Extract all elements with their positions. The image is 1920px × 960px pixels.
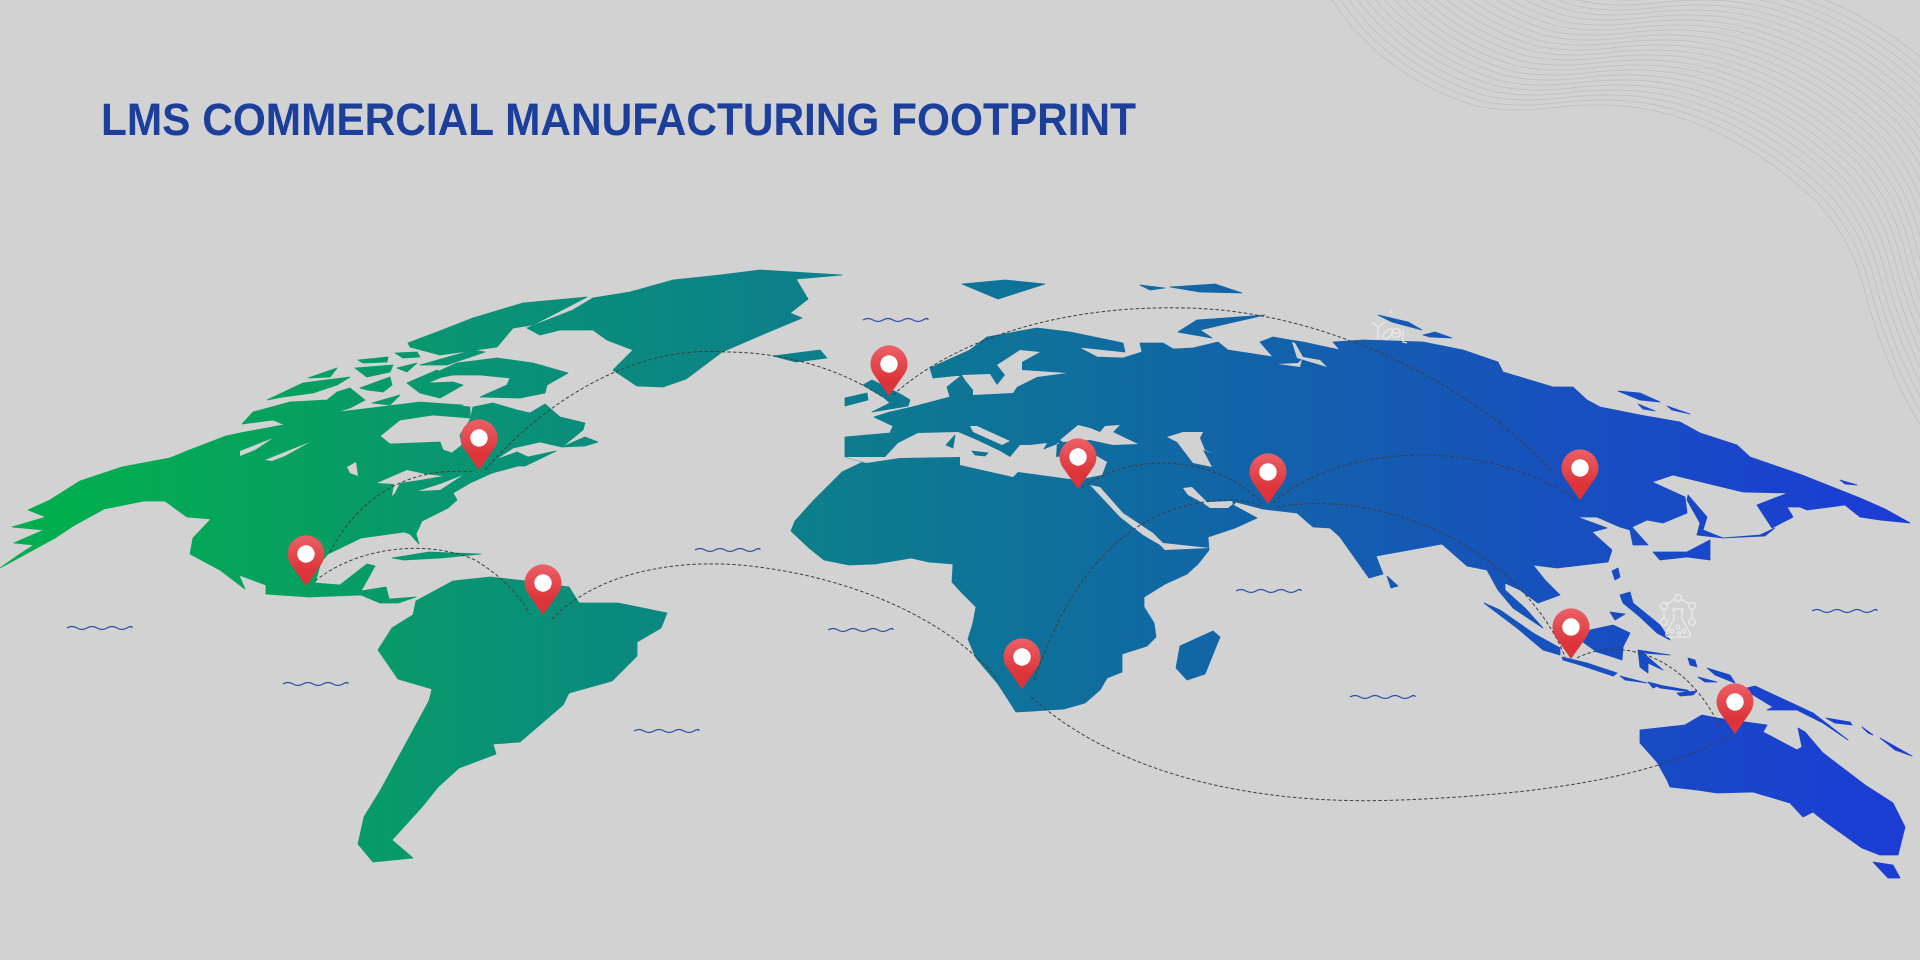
ocean waves — [67, 318, 1877, 732]
pin: Indonesia — [1552, 608, 1590, 659]
North America — [0, 297, 598, 603]
title: LMS COMMERCIAL MANUFACTURING FOOTPRINT — [101, 94, 1136, 145]
icon: pill factory — [1372, 310, 1407, 343]
Novaya Zemlya — [1178, 315, 1265, 338]
inland seas — [845, 342, 1327, 550]
decorative contour lines, top right — [1331, 0, 1920, 440]
pin: United Kingdom — [870, 345, 908, 396]
pin: Australia — [1716, 683, 1754, 734]
British Isles — [845, 380, 910, 412]
Iceland and Svalbard — [773, 280, 1242, 362]
North American lakes — [240, 438, 463, 496]
South America — [358, 577, 667, 862]
pin: Egypt — [1060, 438, 1096, 489]
Indonesia and Philippines — [1484, 592, 1735, 696]
Greenland — [527, 270, 842, 387]
pin: Middle East — [1250, 453, 1286, 504]
Sri Lanka, Madagascar, Taiwan — [1176, 568, 1620, 680]
pin: South America — [524, 564, 562, 615]
world map — [0, 270, 1912, 878]
pin: Mexico — [288, 535, 324, 586]
Arctic Russian islands — [1378, 315, 1857, 485]
pin: South Africa — [1004, 638, 1040, 689]
New Guinea and Pacific islands — [1747, 686, 1912, 756]
Australia — [1640, 715, 1905, 855]
Sicily and Sardinia — [946, 435, 988, 456]
pin: China — [1562, 449, 1598, 500]
Eurasia and Africa — [791, 328, 1910, 712]
dashed connection arcs — [315, 308, 1732, 801]
Japan — [1653, 495, 1775, 560]
icon: molecule flask — [1661, 595, 1695, 637]
Tasmania — [1873, 862, 1900, 878]
pin: Canada — [460, 419, 498, 470]
